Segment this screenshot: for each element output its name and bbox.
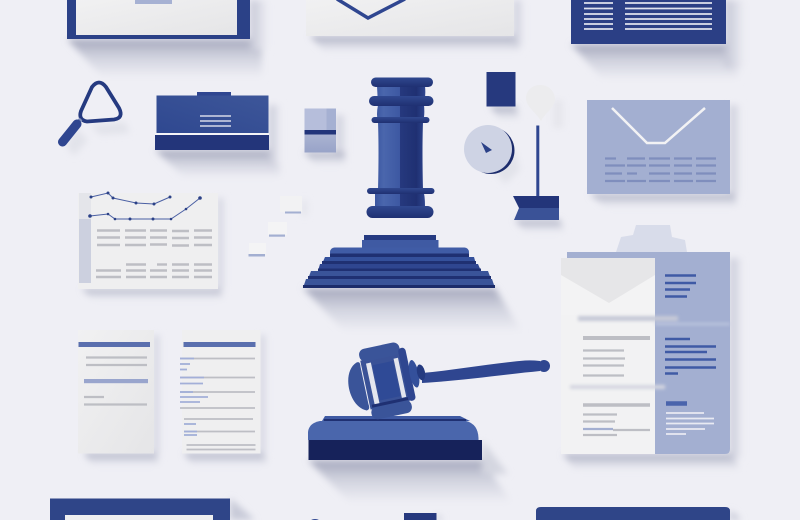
table rows <box>96 230 212 277</box>
icon: briefcase <box>155 92 269 150</box>
icon: stepped tiles <box>248 196 302 256</box>
icon: pin with flag base <box>513 85 559 220</box>
column shaft <box>375 86 425 206</box>
panel: right paper document <box>180 330 260 454</box>
tab <box>616 225 687 252</box>
panel: left paper document <box>78 330 154 454</box>
icon: partial circle, bottom centre <box>307 519 323 520</box>
icon: small card with band <box>304 108 336 152</box>
collars <box>366 78 434 218</box>
icon: partial square, bottom centre <box>404 513 436 520</box>
stepped base <box>303 235 495 288</box>
panel: framed document, bottom left <box>50 498 230 520</box>
icon: gavel on sound block <box>308 337 550 460</box>
white lines <box>666 413 714 434</box>
panel: split document with envelope <box>561 225 730 454</box>
icon: magnifying glass <box>62 82 121 142</box>
gavel handle <box>422 360 550 383</box>
sound block <box>308 416 482 460</box>
blue lines <box>665 276 716 404</box>
paper column <box>561 258 655 454</box>
icon: gavel column and stepped base <box>303 78 495 288</box>
blue column <box>567 252 730 454</box>
chart: line chart document <box>78 192 218 289</box>
line series <box>90 193 200 219</box>
icon: open envelope, top centre <box>306 0 514 36</box>
icon: dark blue square <box>486 72 516 106</box>
envelope <box>561 258 655 315</box>
icon: clock dial <box>464 125 514 174</box>
fold shadows <box>570 316 730 389</box>
panel: framed document, top left <box>67 0 250 39</box>
gavel head <box>342 337 433 424</box>
panel: dark text card, top right <box>571 0 726 44</box>
icon: blue envelope with ruled lines <box>587 100 730 194</box>
panel: rounded bar, bottom right <box>536 507 730 520</box>
data points <box>88 192 202 220</box>
grey lines <box>583 338 650 435</box>
